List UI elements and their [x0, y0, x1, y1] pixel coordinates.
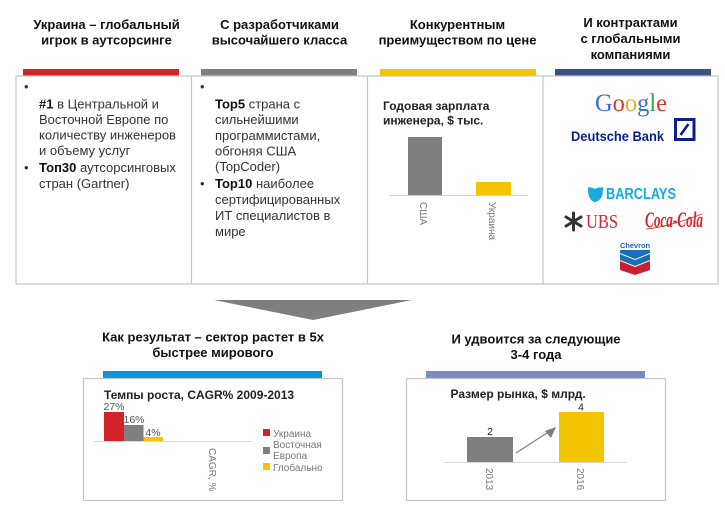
logo: Barclays — [588, 186, 676, 203]
accent bar: grey — [201, 69, 357, 76]
bar chart: annual engineer salary — [383, 99, 528, 241]
logo: UBS: UBS — [586, 211, 618, 233]
text block: developer rankings: (TopCoder) — [215, 159, 280, 174]
text block: Ukraine rankings: #1 в Центральной и — [39, 96, 159, 112]
text block: Ukraine rankings: стран (Gartner) — [39, 176, 129, 191]
heading: Ukraine global player — [33, 17, 180, 48]
text block: Ukraine rankings: количеству инженеров — [39, 128, 176, 142]
legend: Украина — [273, 429, 312, 440]
bar chart: annual engineer salary: США — [417, 202, 428, 225]
logo: UBS — [566, 211, 618, 233]
accent bar: red — [23, 69, 179, 76]
text block: Ukraine rankings: • — [24, 79, 29, 94]
panel: growth rates: Темпы роста, CAGR% 2009-2013 — [104, 388, 294, 402]
heading: top developers — [212, 17, 348, 48]
logo: Deutsche Bank — [571, 120, 694, 144]
heading: Ukraine global player: игрок в аутсорсинге — [41, 32, 172, 48]
legend: Восточная — [273, 440, 322, 451]
bar chart: market size by year — [444, 402, 627, 491]
text block: developer rankings: Top10 наиболее — [215, 176, 314, 191]
heading: Ukraine global player: Украина – глобальный — [33, 17, 180, 32]
legend — [263, 429, 323, 474]
text block: developer rankings: ИТ специалистов в — [215, 208, 331, 223]
bar chart: market size by year: 2016 — [574, 468, 585, 491]
bar chart: annual engineer salary: Годовая зарплата — [383, 99, 490, 113]
bar chart: CAGR by region: CAGR, % — [206, 448, 217, 491]
heading: price advantage: Конкурентным — [410, 17, 505, 32]
heading: result sector growth — [102, 330, 325, 360]
text block: developer rankings: • — [200, 176, 205, 191]
bar chart: CAGR by region: 16% — [123, 414, 145, 426]
bar chart: market size by year: 2013 — [483, 468, 494, 491]
logo: Chevron — [620, 241, 650, 275]
accent bar: blue — [103, 371, 322, 378]
heading: global contracts: компаниями — [591, 47, 670, 62]
bar chart: annual engineer salary: инженера, $ тыс. — [383, 114, 483, 128]
bar chart: CAGR by region: 27% — [103, 401, 125, 413]
accent bar: yellow — [380, 69, 536, 76]
heading: top developers: С разработчиками — [220, 17, 339, 32]
text block: Ukraine rankings — [24, 79, 176, 191]
bar chart: CAGR by region: 4% — [145, 427, 161, 439]
heading: market doubling: 3-4 года — [511, 347, 562, 362]
text block: developer rankings: • — [200, 79, 205, 94]
accent bar: navy — [555, 69, 711, 76]
bar chart: market size by year: 2 — [487, 426, 493, 438]
panel: growth rates — [84, 378, 342, 500]
logo: Barclays: BARCLAYS — [606, 186, 676, 203]
heading: market doubling — [451, 332, 621, 362]
legend: Глобально — [273, 462, 323, 474]
logo: Google: Google — [595, 90, 667, 117]
panel: market size — [406, 378, 666, 500]
text block: Ukraine rankings: Восточной Европе по — [39, 112, 168, 127]
heading: global contracts: И контрактами — [583, 15, 678, 30]
arrow: downward chevron — [214, 300, 412, 320]
heading: price advantage — [379, 17, 536, 48]
text block: developer rankings — [200, 79, 341, 239]
heading: global contracts — [580, 15, 681, 62]
heading: market doubling: И удвоится за следующие — [451, 332, 621, 346]
heading: result sector growth: Как результат – сектор растет в 5x — [102, 330, 325, 344]
panel: market size: Размер рынка, $ млрд. — [450, 387, 586, 401]
heading: price advantage: преимуществом по цене — [379, 32, 536, 48]
heading: top developers: высочайшего класса — [212, 32, 348, 48]
accent bar: periwinkle — [426, 371, 645, 378]
text block: developer rankings: Top5 страна с — [215, 96, 301, 112]
bar chart: market size by year: 4 — [578, 402, 584, 414]
text block: developer rankings: мире — [215, 224, 246, 239]
text block: Ukraine rankings: и объему услуг — [39, 143, 131, 158]
text block: developer rankings: программистами, — [215, 128, 320, 143]
legend: Европа — [273, 451, 308, 462]
text block: developer rankings: сильнейшими — [215, 112, 299, 127]
panel frame: four columns — [16, 76, 718, 284]
bar chart: annual engineer salary: Украина — [486, 202, 497, 241]
heading: result sector growth: быстрее мирового — [152, 345, 274, 360]
text block: Ukraine rankings: • — [24, 160, 29, 175]
arrow: growth 2013 to 2016 — [516, 427, 556, 453]
text block: Ukraine rankings: Топ30 аутсорсинговых — [39, 160, 176, 175]
heading: global contracts: с глобальными — [580, 31, 681, 46]
logo: Chevron: Chevron — [620, 241, 650, 250]
text block: developer rankings: сертифицированных — [215, 192, 341, 207]
text block: developer rankings: обгоняя США — [215, 144, 297, 158]
logo: Deutsche Bank: Deutsche Bank — [571, 129, 664, 144]
bar chart: CAGR by region — [94, 401, 252, 491]
